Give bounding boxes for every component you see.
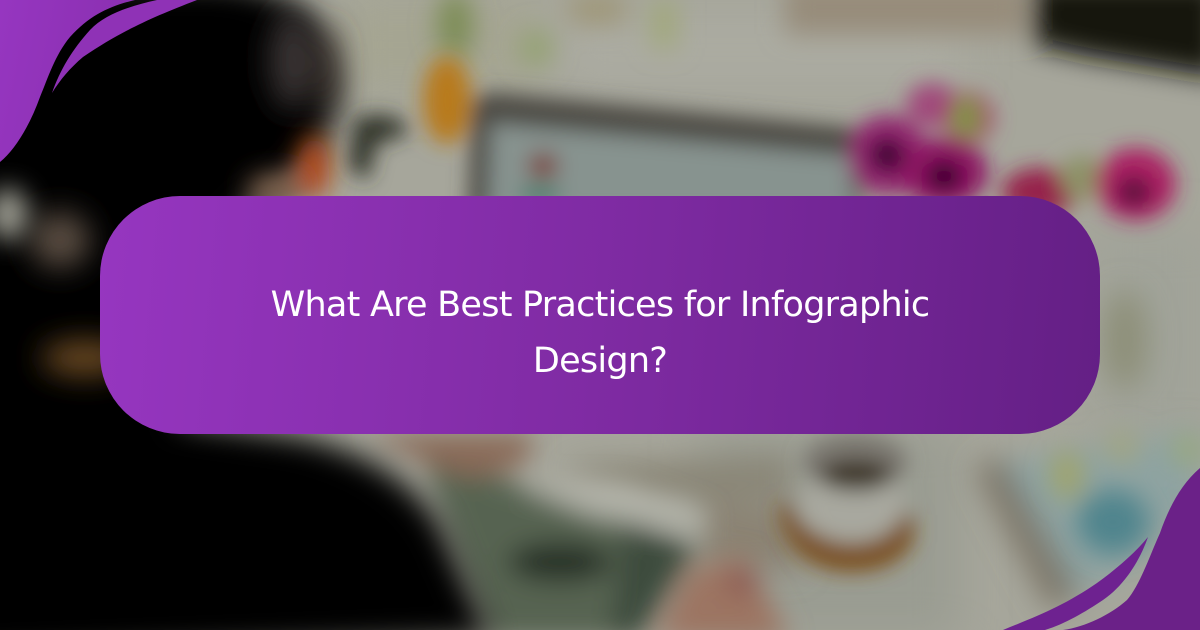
plant stand	[348, 115, 410, 180]
top-left large wave	[0, 0, 135, 162]
tablet and hands	[420, 450, 695, 630]
head and body	[0, 0, 492, 630]
flowers	[906, 83, 958, 127]
orange object	[423, 56, 471, 144]
cup	[785, 505, 908, 566]
top-left sliver	[52, 0, 197, 93]
title: What Are Best Practices for Infographic	[271, 285, 929, 325]
laptop	[468, 93, 862, 215]
keyboard band	[560, 455, 790, 500]
title	[271, 285, 929, 381]
top beige band and dark blind	[785, 0, 1025, 34]
title pill	[100, 196, 1100, 434]
bottom-right large wave	[1063, 468, 1200, 630]
title: Design?	[533, 341, 667, 381]
book	[985, 430, 1200, 600]
bottom-right sliver	[1003, 537, 1148, 630]
book details	[1077, 490, 1149, 554]
